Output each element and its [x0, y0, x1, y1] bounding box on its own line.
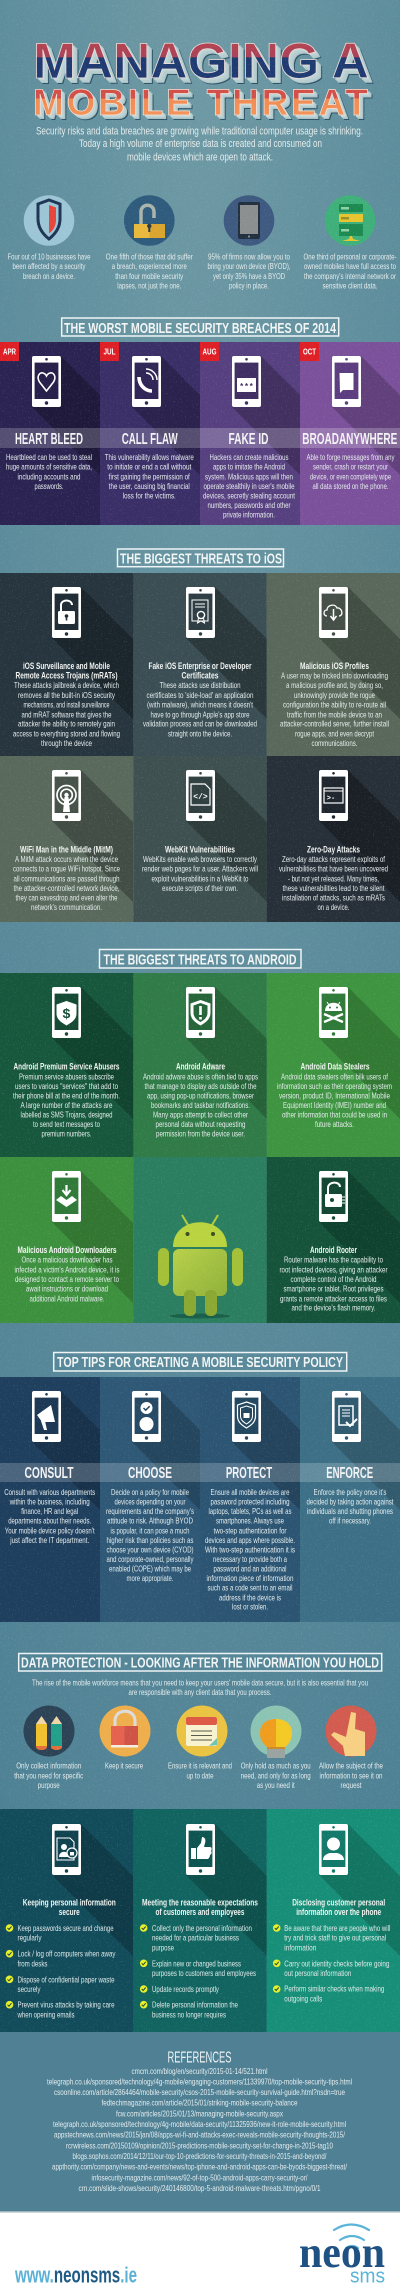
body text: removes all the built-in iOS security	[18, 690, 116, 700]
footer white area	[0, 2212, 400, 2292]
body text: and corporate-owned, personally	[106, 1554, 194, 1564]
body text: designed to contact a remote server to	[15, 1274, 119, 1284]
checklist	[273, 1923, 390, 2004]
icon: phone with check and person	[132, 1391, 161, 1442]
body text: WiFi Man in the Middle (MitM)	[20, 844, 113, 854]
body text: Android Data Stealers	[300, 1062, 370, 1072]
panel: protect	[200, 1377, 300, 1622]
body text: WebKit Vulnerabilities	[165, 844, 235, 854]
heading: CALL FLAW	[122, 431, 178, 448]
body text: requirements and the company's	[106, 1506, 194, 1516]
caption 1: Only collect information	[16, 1761, 81, 1771]
icon: phone with shield lock	[232, 1391, 261, 1442]
checklist: Lock / log off computers when away	[18, 1949, 116, 1959]
panel: ios surveillance	[0, 573, 133, 756]
body text: infected a victim's Android device, it is	[14, 1264, 120, 1274]
date tag: AUG	[202, 348, 216, 356]
body text: Malicious iOS Profiles	[300, 661, 369, 671]
date tag: JUL	[104, 348, 116, 356]
checklist: purposes to customers and employees	[152, 1968, 256, 1978]
icon: phone with android skull	[319, 987, 348, 1038]
body text: exploit vulnerabilities in a WebKit to	[152, 874, 249, 884]
title line: managing a: MANAGING A	[35, 35, 371, 91]
title line: mobile threat: MOBILE THREAT	[38, 87, 373, 128]
body text: Fake iOS Enterprise or Developer	[148, 661, 252, 671]
body text: WebKits enable web browsers to correctly	[143, 854, 257, 864]
reference list: cmcm.com/blog/en/security/2015-01-14/521.html	[132, 2067, 268, 2076]
body text: first gaining the permission of	[109, 471, 190, 481]
icon: phone with document check	[332, 1391, 361, 1442]
icon: phone with open lock	[52, 587, 81, 638]
date tag	[300, 342, 319, 361]
body text: network's communication.	[31, 902, 102, 912]
body text: two-step authentication for	[214, 1525, 287, 1535]
panel: premium service abusers	[0, 973, 133, 1157]
body text: This vulnerability allows malware	[105, 452, 194, 462]
panel: android rooter	[267, 1157, 400, 1323]
icon: light bulb	[250, 1706, 302, 1758]
body text: Zero-Day Attacks	[307, 844, 360, 854]
body text	[279, 844, 388, 912]
title	[23, 1897, 116, 1917]
data protection intro	[32, 1677, 368, 1697]
logo word neon: neon	[299, 2228, 385, 2277]
checklist: outgoing calls	[284, 1994, 322, 2004]
body text: A large number of the attacks are	[20, 1100, 113, 1110]
checklist	[6, 1923, 116, 2020]
title	[142, 1897, 258, 1917]
panel: zero-day attacks	[267, 756, 400, 922]
stat 4: server icon	[325, 195, 375, 246]
body text	[142, 844, 258, 893]
stat 2 text: than four mobile security	[115, 271, 184, 281]
caption 4	[241, 1761, 311, 1790]
body text: apps to imitate the Android	[213, 462, 285, 472]
title	[33, 33, 375, 128]
checklist	[140, 1923, 256, 2020]
references	[0, 2032, 400, 2212]
title	[292, 1897, 385, 1917]
icon: phone with download tray	[52, 1171, 81, 1222]
reference list: fedtechmagazine.com/article/2015/01/striking-mobile-security-balance	[102, 2099, 298, 2108]
title: secure	[59, 1907, 80, 1917]
stat 3 text: bring your own device (BYOD),	[208, 261, 290, 271]
body text	[13, 844, 120, 912]
panel: keeping personal information secure	[0, 1809, 133, 2032]
body text: devices and apps where possible.	[205, 1535, 295, 1545]
body text: Certificates	[182, 670, 219, 680]
body text: Malicious Android Downloaders	[18, 1245, 117, 1255]
panel: enforce	[300, 1377, 400, 1622]
body text: their phone bill at the end of the month.	[13, 1090, 120, 1100]
title line: mobile threat: MOBILE THREAT	[35, 84, 370, 125]
stat 2 text	[106, 252, 193, 290]
body text	[280, 1245, 388, 1313]
website url: www.neonsms.ie	[14, 2262, 137, 2288]
caption 1: purpose	[38, 1780, 60, 1790]
icon: calendar	[176, 1706, 228, 1756]
panel: disclosing over the phone	[267, 1809, 400, 2032]
body text: future attacks.	[315, 1119, 354, 1129]
body text: information piece of information	[206, 1573, 294, 1583]
body text	[306, 1487, 394, 1526]
body text: Hackers can create malicious	[210, 452, 288, 462]
body text: connects to a rogue WiFi hotspot. Since	[13, 864, 120, 874]
heading: ios threats: THE BIGGEST THREATS TO iOS	[120, 552, 282, 568]
stat 3: tablet icon	[224, 195, 274, 246]
body text: passwords.	[34, 481, 64, 491]
body text: within the business, including	[9, 1496, 90, 1506]
body text: have to go through Apple's app store	[150, 709, 250, 719]
body text: With two-step authentication it is	[205, 1544, 295, 1554]
heading: android threats: THE BIGGEST THREATS TO ANDROID	[104, 952, 296, 968]
panel: android robot	[133, 1157, 267, 1323]
body text: execute scripts of their own.	[162, 883, 238, 893]
stat 1 text: been affected by a security	[12, 261, 86, 271]
date tag	[0, 342, 19, 361]
body text: iOS Surveillance and Mobile	[23, 661, 110, 671]
panel: broadanywhere	[300, 342, 400, 525]
body text: These attacks jailbreak a device, which	[14, 680, 119, 690]
icon: phone with cloud download	[319, 587, 348, 638]
stat 2 text: lapses, not just the one.	[117, 280, 181, 290]
body text: additional Android malware.	[30, 1293, 104, 1303]
body text	[6, 452, 92, 491]
stat 2 text: a breach, experienced more	[112, 261, 187, 271]
stat 1 text: breach on a device.	[23, 271, 75, 281]
checklist: Keep passwords secure and change	[18, 1923, 114, 1933]
caption 3: Ensure it is relevant and	[168, 1761, 232, 1771]
icon: phone with megaphone	[32, 1391, 61, 1442]
body text: Android adware abuse is often tied to apps	[143, 1071, 258, 1081]
checklist: out personal information	[284, 1968, 351, 1978]
body text: loss for the victims.	[123, 491, 176, 501]
title line: managing a: MANAGING A	[39, 39, 375, 95]
icon: phone with document lock	[52, 1824, 81, 1875]
body text: validation process and can be downloaded	[143, 719, 257, 729]
stat 3 text	[208, 252, 290, 290]
body text	[4, 1487, 95, 1545]
title line: managing a: MANAGING A	[36, 36, 372, 92]
body text: devices depending on your	[114, 1496, 186, 1506]
body text: and mRAT software that gives the	[22, 709, 112, 719]
icon: phone with code file	[186, 770, 215, 821]
checklist: needed for a particular business	[152, 1933, 239, 1943]
body text: Ensure all mobile devices are	[210, 1487, 290, 1497]
body text: access to everything stored and flowing	[13, 728, 120, 738]
panel: fake ios certificates	[133, 573, 267, 756]
title line: managing a: MANAGING A	[37, 37, 373, 93]
icon: phone with warning shield	[186, 987, 215, 1038]
panel: consult	[0, 1377, 100, 1622]
body text	[306, 452, 395, 491]
date tag	[100, 342, 119, 361]
body text: system. Malicious apps will then	[205, 471, 293, 481]
body text: off if necessary.	[329, 1516, 371, 1526]
icon: pencils	[24, 1706, 74, 1756]
panel: fake id	[200, 342, 300, 525]
reference list	[47, 2067, 352, 2193]
panel: reasonable expectations	[133, 1809, 267, 2032]
body text	[203, 452, 295, 520]
checklist: purpose	[152, 1942, 174, 1952]
references heading: REFERENCES	[168, 2050, 232, 2066]
data protection intro: are responsible with any client data that you process.	[128, 1687, 272, 1697]
body text: just affect the IT department.	[9, 1535, 89, 1545]
icon: phone with dollar shield	[52, 987, 81, 1038]
heading: android threats	[100, 950, 301, 968]
body text: Android Rooter	[310, 1245, 357, 1255]
body text: straight onto the device.	[168, 728, 232, 738]
body text: enabled (COPE) which may be	[109, 1563, 191, 1573]
intro text: Today a high volume of enterprise data is created and consumed on	[79, 138, 322, 150]
icon: phone with thumbs up	[186, 1824, 215, 1875]
checklist: Explain new or changed business	[152, 1958, 241, 1968]
icon: phone with certificate	[186, 587, 215, 638]
icon: padlock	[100, 1706, 150, 1756]
caption 1: that you need for specific	[14, 1770, 84, 1780]
intro text: mobile devices which are open to attack.	[127, 152, 273, 164]
panel: choose	[100, 1377, 200, 1622]
body text: premium numbers.	[42, 1129, 92, 1139]
body text	[277, 1062, 392, 1129]
body text: address if the device is	[219, 1592, 281, 1602]
panel: wifi man in the middle	[0, 756, 133, 922]
heading: PROTECT	[226, 1465, 272, 1482]
body text: on a device.	[318, 902, 350, 912]
icon: phone with wifi tower	[52, 770, 81, 821]
body text: the attacker-controlled network device,	[14, 883, 120, 893]
checklist: Prevent virus attacks by taking care	[18, 2000, 115, 2010]
heading: HEART BLEED	[15, 431, 83, 448]
body text: Remote Access Trojans (mRATs)	[16, 670, 118, 680]
stat 3 text: policy in place.	[229, 280, 269, 290]
body text	[143, 661, 257, 738]
checklist: Dispose of confidential paper waste	[18, 1974, 115, 1984]
reference list: crn.com/slide-shows/security/240146800/top-5-android-malware-threats.htm/pgno/0/1	[78, 2184, 321, 2193]
body text: Many apps attempt to collect other	[153, 1109, 248, 1119]
icon: phone with open lock	[319, 1171, 348, 1222]
panel: malicious android downloaders	[0, 1157, 133, 1323]
body text: communications.	[312, 738, 358, 748]
body text: labelled as SMS Trojans, designed	[20, 1109, 113, 1119]
checklist: securely	[18, 1984, 41, 1994]
icon: phone with heart	[32, 356, 61, 407]
reference list: fcw.com/articles/2015/01/13/managing-mobile-security.aspx	[116, 2109, 283, 2118]
body text: necessary to provide both a	[213, 1554, 287, 1564]
body text: including accounts and	[18, 471, 81, 481]
date tag: OCT	[303, 348, 316, 356]
stat 3 text: yet only 35% have a BYOD	[213, 271, 285, 281]
stat 1 text	[8, 252, 91, 281]
body text	[280, 661, 389, 748]
caption 3	[168, 1761, 232, 1780]
caption 5	[319, 1761, 383, 1790]
title line: mobile threat: MOBILE THREAT	[33, 82, 368, 123]
icon: android robot	[158, 1215, 243, 1318]
body text: Consult with various departments	[4, 1487, 95, 1497]
body text	[205, 1487, 295, 1612]
body text: render web pages for a user. Attackers will	[142, 864, 258, 874]
icon: phone with terminal: >-	[327, 795, 335, 803]
body text: password and an additional	[214, 1563, 287, 1573]
caption 4: as you need it	[257, 1780, 295, 1790]
body text: lost or stolen.	[232, 1602, 268, 1612]
icon: phone with message	[332, 356, 361, 407]
body text	[106, 1487, 194, 1583]
icon: phone with person	[319, 1824, 348, 1875]
logo: neon sms	[299, 2224, 385, 2288]
logo signal arcs	[334, 2224, 369, 2248]
icon: phone with password	[232, 356, 261, 407]
body text: choose your own device (CYOD)	[106, 1544, 194, 1554]
stat 1 text: Four out of 10 businesses have	[8, 252, 91, 262]
checklist: regularly	[18, 1933, 42, 1943]
body text: finance, HR and legal	[21, 1506, 78, 1516]
checklist: Delete personal information the	[152, 2000, 238, 2010]
body text: Decide on a policy for mobile	[111, 1487, 189, 1497]
icon: phone with call	[132, 356, 161, 407]
body text: numbers, passwords and other	[208, 500, 291, 510]
stat 2 text: One fifth of those that did suffer	[106, 252, 193, 262]
caption 3: up to date	[186, 1770, 214, 1780]
title: of customers and employees	[156, 1907, 245, 1917]
body text: Android Adware	[176, 1062, 225, 1072]
body text	[14, 1245, 120, 1303]
body text: such as a code sent to an email	[208, 1583, 293, 1593]
body text: Android Premium Service Abusers	[14, 1062, 120, 1072]
caption 4: Only hold as much as you	[241, 1761, 311, 1771]
stat 1: shield icon	[24, 195, 74, 246]
title line: mobile threat: MOBILE THREAT	[36, 85, 371, 126]
body text: departments about their needs.	[8, 1516, 91, 1526]
body text: that manage to display ads outside of the	[144, 1081, 257, 1091]
reference list: infosecurity-magazine.com/news/92-of-top-500-android-apps-carry-security-or/	[92, 2173, 308, 2182]
caption 1	[14, 1761, 84, 1790]
body text: operate stealthily in user's mobile	[204, 481, 295, 491]
date tag: APR	[3, 348, 16, 356]
body text	[105, 452, 194, 501]
body text: Heartbleed can be used to steal	[6, 452, 92, 462]
panel: heart bleed	[0, 342, 100, 525]
body text: personal data without requesting	[156, 1119, 246, 1129]
body text: users to various "services" that add to	[15, 1081, 118, 1091]
body text: attacker the ability to remotely gain	[18, 719, 115, 729]
heading: CHOOSE	[128, 1465, 172, 1482]
date tag	[200, 342, 219, 361]
body text: huge amounts of sensitive data,	[6, 462, 92, 472]
body text: app, using pop-up notifications, browser	[147, 1090, 254, 1100]
body text: to send text messages to	[33, 1119, 100, 1129]
body text: devices, secretly stealing account	[203, 491, 295, 501]
body text: Premium service abusers subscribe	[19, 1071, 114, 1081]
body text	[13, 661, 120, 748]
body text: they can eavesdrop and even alter the	[16, 893, 118, 903]
body text: certificates to 'side-load' an application	[146, 690, 254, 700]
logo word sms: sms	[350, 2266, 385, 2288]
title line: managing a: MANAGING A	[33, 33, 369, 89]
icon: pointing hand	[326, 1706, 376, 1756]
body text: all communications are passed through	[14, 874, 120, 884]
heading: FAKE ID	[228, 431, 268, 448]
stat 4 text	[304, 252, 397, 290]
title line: managing a: MANAGING A	[38, 38, 374, 94]
body text: await instructions or download	[26, 1284, 108, 1294]
title: Keeping personal information	[23, 1897, 116, 1907]
body text: smartphones. Always use	[216, 1516, 284, 1526]
body text: mechanisms, and install surveillance	[24, 700, 110, 710]
stat 3 text: 95% of firms now allow you to	[208, 252, 290, 262]
checklist: information	[284, 1942, 316, 1952]
icon: phone with code file: </>	[193, 793, 208, 802]
caption 5: request	[340, 1780, 362, 1790]
body text: (with malware), which means it doesn't	[147, 700, 253, 710]
body text: through the device	[41, 738, 92, 748]
body text: password protected including	[210, 1496, 290, 1506]
icon: phone with dollar shield: $	[62, 1007, 71, 1023]
heading: ios threats	[118, 549, 284, 568]
body text	[13, 1062, 120, 1139]
checklist: Collect only the personal information	[152, 1923, 252, 1933]
heading: CONSULT	[24, 1465, 74, 1482]
panel: android adware	[133, 973, 267, 1157]
panel: android data stealers	[267, 973, 400, 1157]
checklist: Update records promptly	[152, 1984, 219, 1994]
title: Meeting the reasonable expectations	[142, 1897, 258, 1907]
body text: Your mobile device policy doesn't	[5, 1525, 95, 1535]
body text	[143, 1062, 258, 1139]
checklist: from desks	[18, 1958, 48, 1968]
panel: call flaw	[100, 342, 200, 525]
icon: phone with terminal	[319, 770, 348, 821]
body text: private information.	[223, 510, 275, 520]
icon: phone with password: ***	[239, 383, 254, 392]
body text: permission from the device user.	[156, 1129, 245, 1139]
body text: to initiate or end a call without	[107, 462, 192, 472]
body text: bookmarks and taskbar notifications.	[151, 1100, 250, 1110]
panel: webkit vulnerabilities	[133, 756, 267, 922]
caption 2: Keep it secure	[105, 1761, 143, 1771]
body text: attitude to risk. Although BYOD	[107, 1516, 193, 1526]
body text: is popular, it can pose a much	[110, 1525, 190, 1535]
stat 4 text: sensitive client data.	[322, 280, 378, 290]
body text: Once a malicious downloader has	[22, 1255, 112, 1265]
stat 2: padlock icon	[124, 195, 175, 246]
title line: mobile threat: MOBILE THREAT	[37, 86, 372, 127]
body text: A MitM attack occurs when the device	[15, 854, 118, 864]
body text: the user, causing big financial	[109, 481, 190, 491]
body text: laptops, tablets, PCs as well as	[208, 1506, 292, 1516]
intro text	[36, 126, 363, 164]
caption 4: need, and only for as long	[241, 1770, 311, 1780]
checklist: business no longer requires	[152, 2010, 226, 2020]
body text: These attacks use distribution	[160, 680, 241, 690]
panel: malicious ios profiles	[267, 573, 400, 756]
body text: higher risk than policies such as	[106, 1535, 194, 1545]
checklist: when opening emails	[17, 2010, 74, 2020]
body text: more appropriate.	[126, 1573, 174, 1583]
